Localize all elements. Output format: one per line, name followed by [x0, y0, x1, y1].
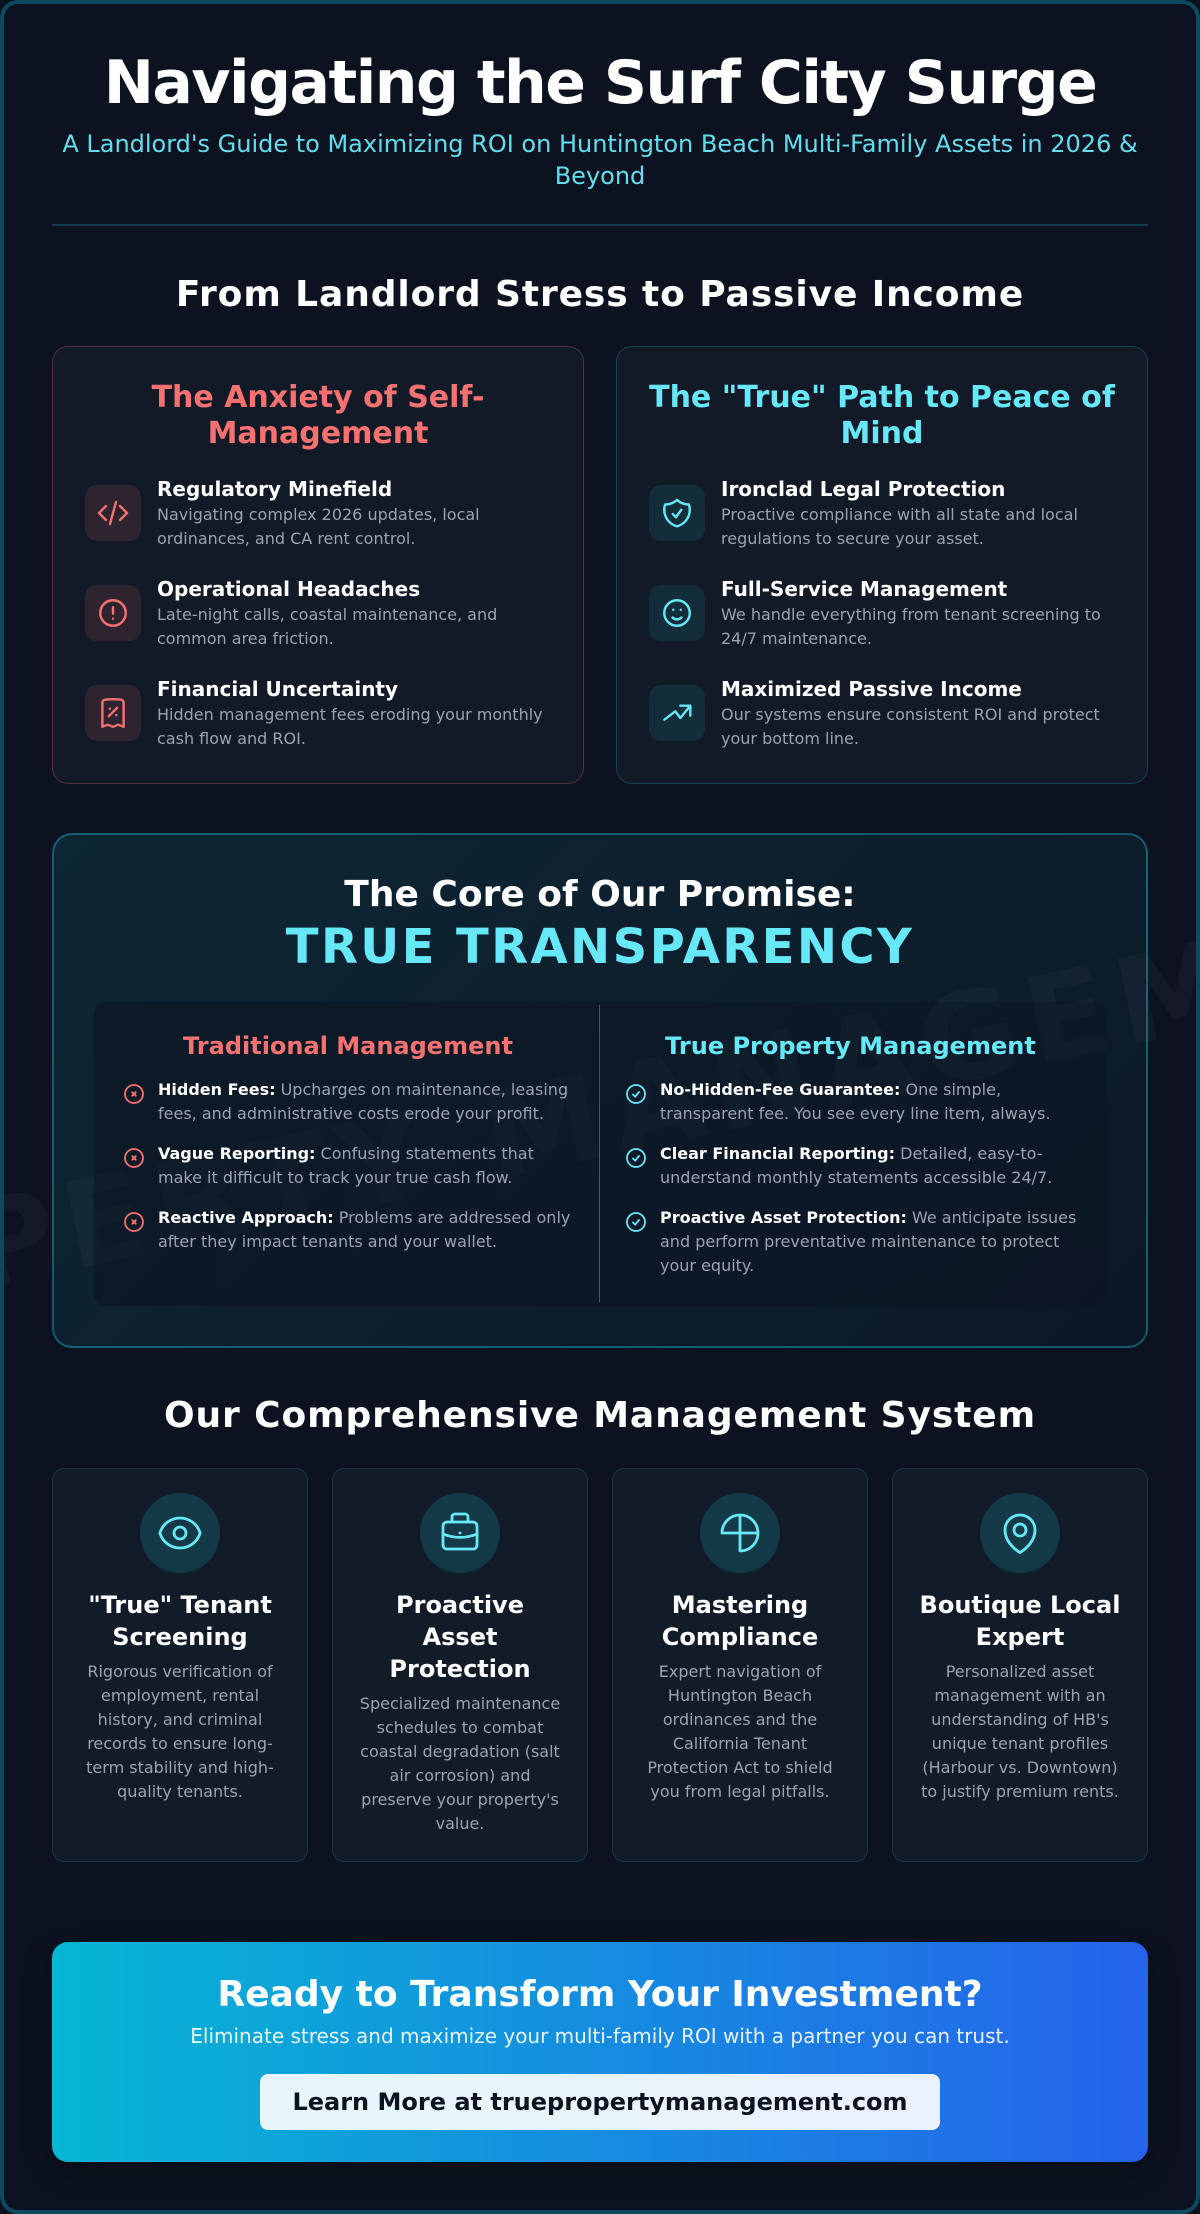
card text: employment, rental: [101, 1686, 259, 1705]
card text: (Harbour vs. Downtown): [922, 1758, 1118, 1777]
card text: California Tenant: [673, 1734, 807, 1753]
icon: smiling face: [649, 585, 705, 641]
card: mastering compliance: [612, 1468, 868, 1862]
card title: [389, 1591, 531, 1683]
list item: hidden fees: fees, and administrative costs erode your profit.: [158, 1104, 544, 1123]
icon: code brackets: [85, 485, 141, 541]
icon: divided circle: [700, 1493, 780, 1573]
item: maximized passive income: Maximized Passive Income: [721, 677, 1022, 701]
panel: anxiety of self-management: [52, 346, 584, 784]
panel: core promise: [52, 833, 1148, 1348]
icon: briefcase: [420, 1493, 500, 1573]
cta button: Learn More at truepropertymanagement.com: [292, 2088, 908, 2116]
core heading: The Core of Our Promise:: [344, 874, 856, 915]
panel heading: anxiety: The Anxiety of Self-: [152, 380, 484, 415]
item: financial uncertainty: Financial Uncertainty: [157, 677, 398, 701]
card title: "True" Tenant: [88, 1591, 272, 1619]
panel heading: true path: Mind: [841, 416, 923, 451]
subtitle: [62, 130, 1138, 190]
card text: you from legal pitfalls.: [650, 1782, 830, 1801]
card title: Asset: [423, 1623, 497, 1651]
column: traditional management: [124, 1032, 570, 1251]
list item: hidden fees: Hidden Fees: Upcharges on maintenance, leasing: [158, 1080, 568, 1099]
list item: vague reporting: [124, 1144, 534, 1187]
heading: comprehensive system: Our Comprehensive Management System: [164, 1395, 1036, 1436]
list item: no hidden fee: [626, 1080, 1051, 1123]
item: ironclad legal protection: Ironclad Legal Protection: [721, 477, 1005, 501]
card title: Proactive: [396, 1591, 524, 1619]
item: regulatory minefield: ordinances, and CA rent control.: [157, 529, 415, 548]
card text: coastal degradation (salt: [360, 1742, 560, 1761]
card text: Specialized maintenance: [360, 1694, 560, 1713]
card text: [647, 1662, 833, 1801]
card text: ordinances and the: [663, 1710, 817, 1729]
card text: understanding of HB's: [931, 1710, 1109, 1729]
item: operational headaches: Operational Headaches: [157, 577, 420, 601]
item: maximized passive income: [649, 677, 1100, 748]
item: ironclad legal protection: regulations to secure your asset.: [721, 529, 984, 548]
icon: trending up arrow: [649, 685, 705, 741]
card title: Screening: [112, 1623, 248, 1651]
item: regulatory minefield: [85, 477, 480, 548]
list item: reactive approach: [124, 1208, 570, 1251]
column heading: traditional: Traditional Management: [183, 1032, 513, 1060]
item: maximized passive income: your bottom line.: [721, 729, 859, 748]
item: maximized passive income: Our systems ensure consistent ROI and protect: [721, 705, 1100, 724]
item: financial uncertainty: cash flow and ROI.: [157, 729, 306, 748]
cta button: [260, 2074, 940, 2130]
list item: no hidden fee: transparent fee. You see every line item, always.: [660, 1104, 1051, 1123]
card text: history, and criminal: [98, 1710, 262, 1729]
card text: [360, 1694, 560, 1833]
comparison box: [94, 1002, 1106, 1306]
icon: shield check: [649, 485, 705, 541]
item: operational headaches: [85, 577, 497, 648]
item: ironclad legal protection: Proactive compliance with all state and local: [721, 505, 1078, 524]
item: ironclad legal protection: [649, 477, 1078, 548]
icon: percent receipt: [85, 685, 141, 741]
cta text: Eliminate stress and maximize your multi-family ROI with a partner you can trust.: [190, 2024, 1010, 2048]
card title: [662, 1591, 818, 1651]
panel heading: true path: The "True" Path to Peace of: [649, 380, 1115, 415]
card text: to justify premium rents.: [921, 1782, 1119, 1801]
card title: Mastering: [672, 1591, 808, 1619]
list item: proactive protection: your equity.: [660, 1256, 754, 1275]
card text: air corrosion) and: [390, 1766, 530, 1785]
list item: clear reporting: understand monthly statements accessible 24/7.: [660, 1168, 1052, 1187]
card title: Protection: [389, 1655, 531, 1683]
panel heading: anxiety: [152, 380, 484, 451]
card text: records to ensure long-: [87, 1734, 273, 1753]
item: regulatory minefield: Regulatory Minefield: [157, 477, 392, 501]
icon: eye: [140, 1493, 220, 1573]
item: full-service management: Full-Service Management: [721, 577, 1007, 601]
list item: vague reporting: Vague Reporting: Confusing statements that: [158, 1144, 534, 1163]
card text: [921, 1662, 1119, 1801]
card title: Expert: [976, 1623, 1064, 1651]
subtitle: A Landlord's Guide to Maximizing ROI on Huntington Beach Multi-Family Assets in 2026 &: [62, 130, 1138, 158]
card title: [920, 1591, 1120, 1651]
item: full-service management: 24/7 maintenance.: [721, 629, 872, 648]
panel heading: true path: [649, 380, 1116, 451]
core highlight: true transparency: TRUE TRANSPARENCY: [286, 919, 914, 975]
card text: value.: [436, 1814, 484, 1833]
item: full-service management: [649, 577, 1101, 648]
subtitle: Beyond: [555, 162, 645, 190]
list item: clear reporting: Clear Financial Reporting: Detailed, easy-to-: [660, 1144, 1042, 1163]
card: tenant screening: [52, 1468, 308, 1862]
item: regulatory minefield: Navigating complex 2026 updates, local: [157, 505, 480, 524]
card text: Protection Act to shield: [647, 1758, 833, 1777]
card text: quality tenants.: [117, 1782, 243, 1801]
panel: true path to peace of mind: [616, 346, 1148, 784]
item: operational headaches: Late-night calls, coastal maintenance, and: [157, 605, 497, 624]
card text: unique tenant profiles: [932, 1734, 1108, 1753]
column heading: true: True Property Management: [665, 1032, 1036, 1060]
list item: proactive protection: and perform preventative maintenance to protect: [660, 1232, 1059, 1251]
list item: hidden fees: [124, 1080, 568, 1123]
card text: Rigorous verification of: [87, 1662, 273, 1681]
list item: clear reporting: [626, 1144, 1052, 1187]
list item: vague reporting: make it difficult to track your true cash flow.: [158, 1168, 512, 1187]
column: true property management: [626, 1032, 1076, 1275]
card text: [86, 1662, 274, 1801]
list item: proactive protection: [626, 1208, 1076, 1275]
card title: Compliance: [662, 1623, 818, 1651]
item: financial uncertainty: [85, 677, 543, 748]
card text: Personalized asset: [946, 1662, 1094, 1681]
card text: Huntington Beach: [668, 1686, 812, 1705]
list item: proactive protection: Proactive Asset Protection: We anticipate issues: [660, 1208, 1076, 1227]
item: operational headaches: common area friction.: [157, 629, 334, 648]
card title: [88, 1591, 272, 1651]
card text: term stability and high-: [86, 1758, 274, 1777]
call to action banner: [52, 1942, 1148, 2162]
card: asset protection: [332, 1468, 588, 1862]
list item: reactive approach: Reactive Approach: Problems are addressed only: [158, 1208, 570, 1227]
heading: from landlord stress: From Landlord Stress to Passive Income: [176, 274, 1024, 315]
item: full-service management: We handle everything from tenant screening to: [721, 605, 1101, 624]
card text: preserve your property's: [361, 1790, 559, 1809]
list item: no hidden fee: No-Hidden-Fee Guarantee: One simple,: [660, 1080, 1001, 1099]
panel heading: anxiety: Management: [208, 416, 428, 451]
cta heading: Ready to Transform Your Investment?: [217, 1974, 983, 2015]
card text: Expert navigation of: [659, 1662, 821, 1681]
list item: reactive approach: after they impact tenants and your wallet.: [158, 1232, 497, 1251]
card text: schedules to combat: [377, 1718, 543, 1737]
item: financial uncertainty: Hidden management fees eroding your monthly: [157, 705, 543, 724]
icon: exclamation circle: [85, 585, 141, 641]
title: Navigating the Surf City Surge: [104, 48, 1096, 118]
card: boutique local expert: [892, 1468, 1148, 1862]
card text: management with an: [934, 1686, 1106, 1705]
card title: Boutique Local: [920, 1591, 1120, 1619]
icon: map pin: [980, 1493, 1060, 1573]
